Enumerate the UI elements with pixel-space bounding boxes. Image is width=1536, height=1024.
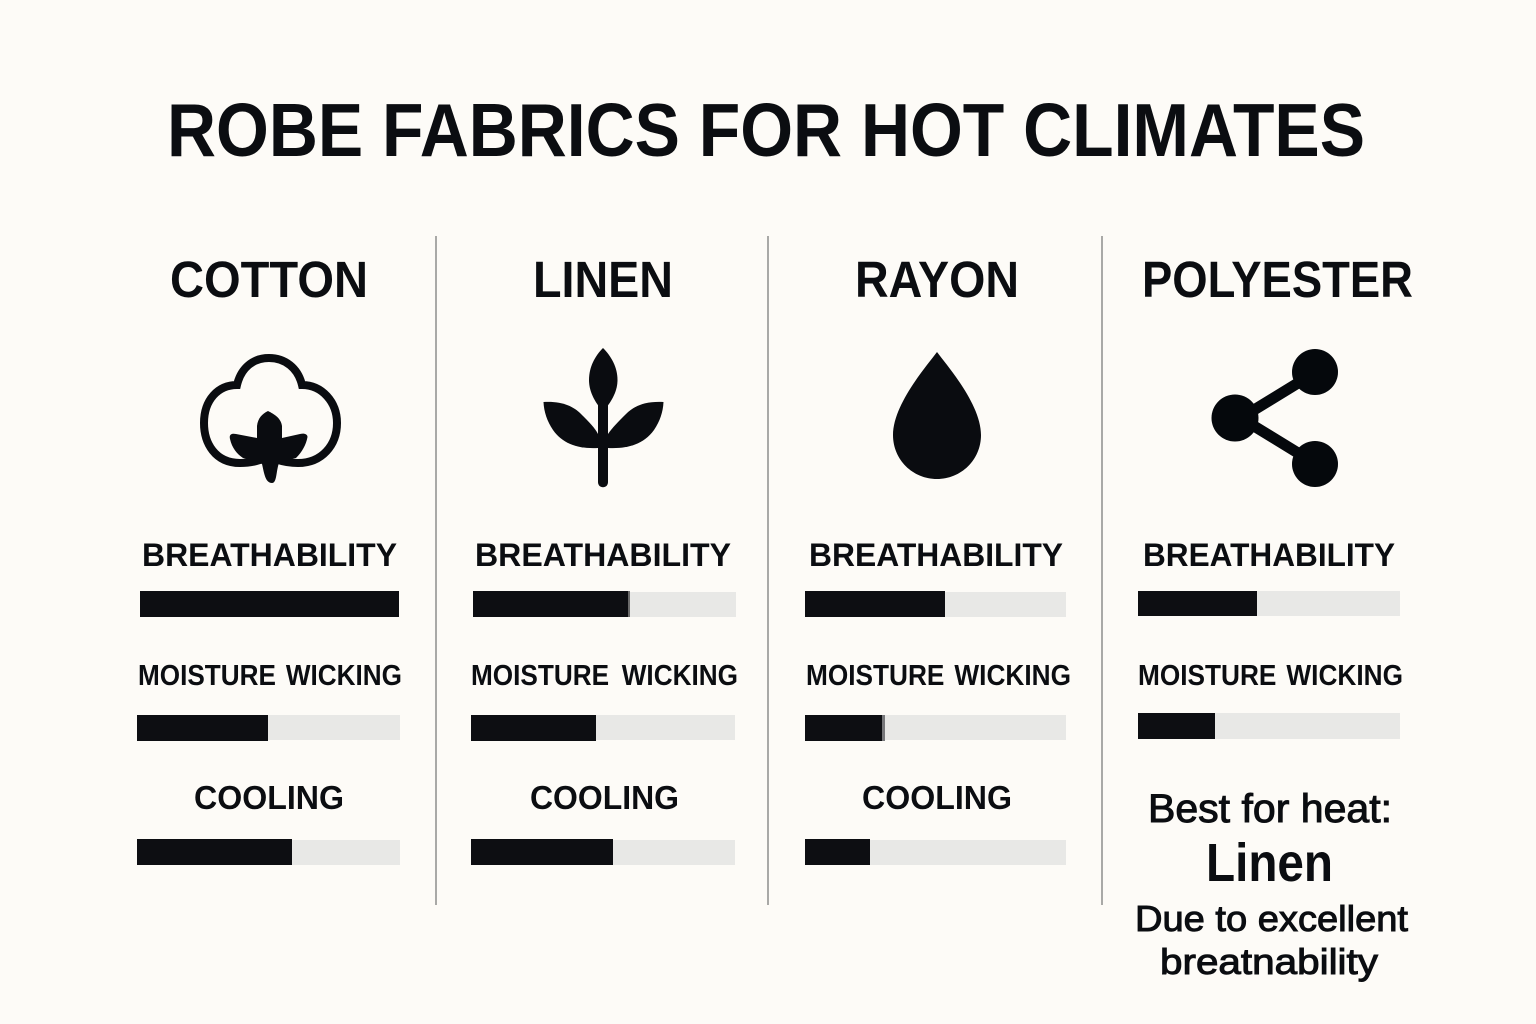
icon: cotton boll (204, 358, 337, 483)
heading: rayon: RAYON (855, 251, 1019, 308)
heading: polyester: POLYESTER (1142, 251, 1413, 308)
bar: breathability (140, 591, 399, 617)
panel: cotton (137, 251, 402, 865)
bar: breathability (805, 591, 1066, 617)
callout winner: Linen (1206, 833, 1333, 893)
heading: linen: LINEN (533, 251, 673, 308)
bar: breathability (1138, 591, 1400, 616)
panel: rayon (805, 251, 1071, 865)
label: moisture wicking: MOISTURE WICKING (806, 660, 1071, 692)
icon: leaf sprig (544, 348, 664, 487)
bar: moisture wicking (805, 715, 1066, 741)
callout reason (1135, 898, 1408, 982)
callout: best for heat (1135, 787, 1408, 982)
callout reason: Due to excellent (1135, 898, 1408, 939)
label: moisture wicking: MOISTURE WICKING (471, 660, 738, 692)
callout lead-in: Best for heat: (1148, 787, 1392, 831)
label: cooling: COOLING (862, 779, 1012, 816)
bar: moisture wicking (137, 715, 400, 741)
bar: cooling (137, 839, 400, 865)
heading: cotton: COTTON (170, 251, 368, 308)
bar: cooling (471, 839, 735, 865)
icon: water drop (893, 352, 981, 479)
title: ROBE FABRICS FOR HOT CLIMATES (167, 88, 1365, 172)
bar: moisture wicking (471, 715, 735, 741)
callout reason: breatnability (1160, 941, 1378, 982)
panel: polyester (1135, 251, 1413, 982)
icon: molecule network (1212, 349, 1338, 487)
bar: moisture wicking (1138, 713, 1400, 739)
label: moisture wicking: MOISTURE WICKING (138, 660, 402, 692)
bar: breathability (473, 591, 736, 617)
panel: linen (471, 251, 738, 865)
label: breathability: BREATHABILITY (1143, 537, 1395, 573)
label: moisture wicking: MOISTURE WICKING (1138, 660, 1403, 692)
label: breathability: BREATHABILITY (809, 537, 1063, 573)
label: breathability: BREATHABILITY (142, 537, 397, 573)
bar: cooling (805, 839, 1066, 865)
label: cooling: COOLING (194, 779, 344, 816)
label: breathability: BREATHABILITY (475, 537, 731, 573)
label: cooling: COOLING (530, 779, 679, 816)
